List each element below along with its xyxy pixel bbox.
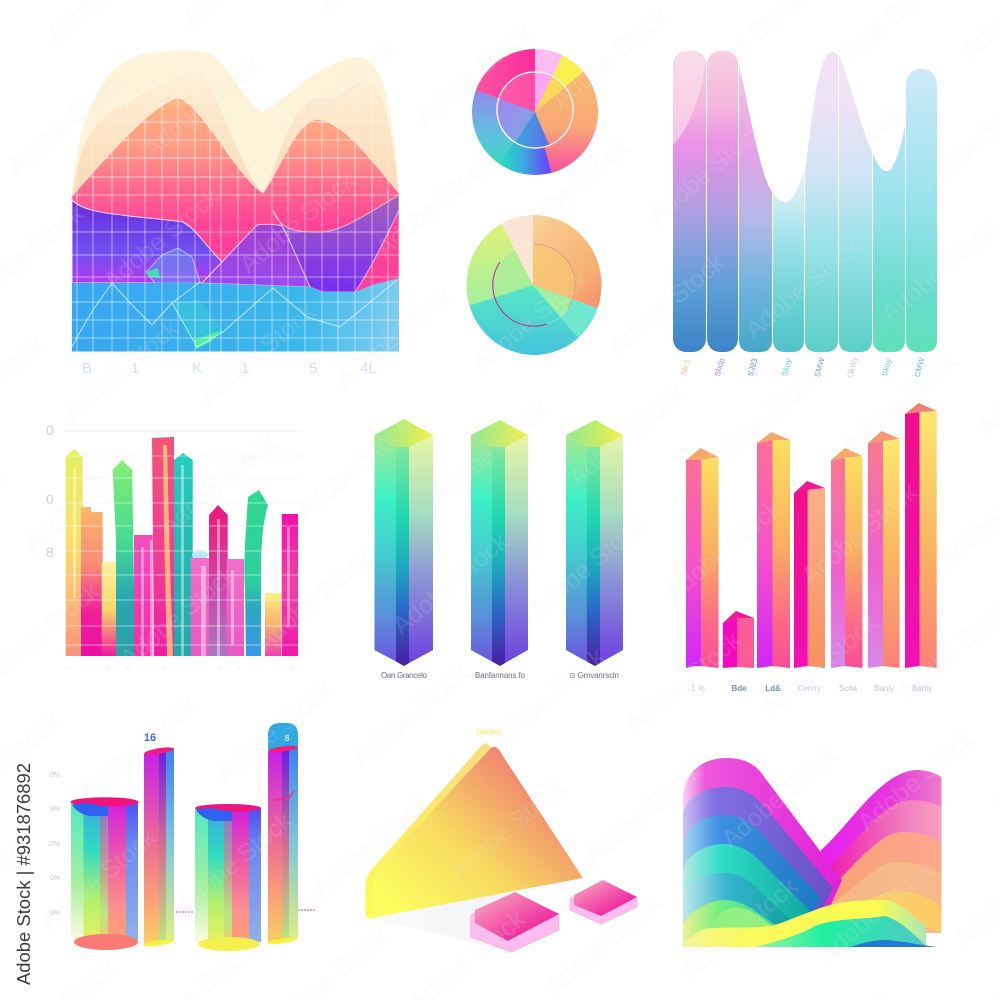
axis labels: 0% [50, 875, 60, 882]
inner purple wedge [498, 99, 535, 142]
x axis labels: 4L [360, 360, 377, 377]
pink main area [72, 98, 399, 352]
bar labels: Sc#a [839, 684, 858, 693]
bar 8 [191, 558, 209, 656]
cream back area [72, 51, 399, 352]
left face [471, 435, 492, 662]
white line series [72, 280, 397, 347]
axis labels [50, 772, 60, 917]
teal sector [472, 90, 535, 163]
ring accent [493, 262, 547, 326]
large tile [471, 892, 559, 952]
axis labels: 0% [50, 841, 60, 848]
bar labels: Shdp [713, 357, 726, 378]
bar 4 [113, 460, 135, 656]
caption: ⊙ Gmvanrscln [569, 671, 619, 680]
peach sector [502, 215, 533, 284]
ring [493, 244, 575, 326]
right face [505, 435, 528, 663]
bar 7 [174, 453, 193, 656]
bar 6 [868, 431, 900, 668]
x ticks: ~ . [237, 666, 244, 672]
inner blue wedge [516, 112, 549, 147]
x axis labels: 1 [131, 360, 139, 377]
bar labels: SJ93 [746, 357, 759, 377]
x axis labels: K [192, 360, 202, 377]
bar 6 [839, 56, 872, 352]
bar 2 [723, 611, 754, 668]
bar 5 [831, 448, 862, 668]
x ticks: ~ . [68, 666, 75, 672]
bar 10 [227, 559, 244, 656]
pale blue bump [192, 550, 208, 560]
bar labels [679, 356, 927, 379]
watermark id: Adobe Stock | #931876892 [13, 763, 34, 985]
panel: multi-colour bar chart [46, 422, 303, 672]
left face [374, 435, 396, 662]
triangle back edge [365, 743, 494, 918]
left magenta layer [683, 758, 842, 947]
small tile [570, 880, 637, 924]
bar labels: OkWy [845, 356, 860, 379]
x ticks: ~ . [290, 666, 297, 672]
green wave [755, 916, 926, 947]
x axis labels [82, 360, 377, 377]
bar labels: CMW [913, 356, 927, 378]
right salmon hump [809, 832, 942, 933]
x ticks: ~ . [143, 666, 150, 672]
x axis labels: B [82, 360, 92, 377]
x ticks: ~ . [255, 666, 262, 672]
x ticks: ~ . [125, 666, 132, 672]
bar labels: SMW [813, 356, 827, 378]
x ticks: ~ . [218, 666, 225, 672]
bar 6 [152, 437, 174, 656]
bar 11 [244, 490, 268, 656]
panel: 3D ascending bars [686, 403, 937, 693]
bar labels: Banly [874, 684, 894, 693]
peach mid area [72, 69, 399, 352]
left blue layer [683, 815, 821, 947]
top face [471, 420, 528, 447]
inner green wedge [533, 285, 572, 316]
bar labels: 1 % [691, 684, 705, 693]
bar 3 [102, 562, 117, 656]
bar 4: 8 [284, 733, 290, 743]
bar labels: Ld& [765, 684, 781, 693]
left face [566, 435, 587, 662]
left blue-teal layer [683, 873, 792, 947]
bar 6 stripe [163, 445, 173, 656]
panel: layered area chart [72, 50, 399, 377]
bar 9 [209, 505, 228, 656]
y axis labels: 8 [46, 544, 54, 560]
panel: isometric prism A [374, 419, 433, 680]
bar 13 [282, 514, 298, 656]
right yellow-orange hump [830, 891, 942, 933]
panel: pie chart top [472, 49, 598, 175]
inner lime hump [712, 907, 772, 928]
ring [497, 72, 573, 148]
bar 8 [906, 69, 937, 352]
pink sector [476, 49, 535, 112]
y axis labels [46, 422, 54, 560]
value label 16: 16 [144, 732, 156, 744]
panel: tall rounded bars with wave [673, 51, 937, 379]
x axis labels: 1 [241, 360, 249, 377]
axis labels: 0% [50, 772, 60, 779]
purple middle area [200, 224, 310, 287]
triangle label: [xxxxxx] [477, 730, 501, 736]
left green layer [683, 900, 776, 947]
light purple facet [146, 248, 200, 303]
bar labels [691, 684, 932, 693]
x ticks: ~ . [183, 666, 190, 672]
centre face [587, 447, 600, 666]
bar labels: Skoy [780, 358, 793, 377]
axis ticks [176, 910, 315, 912]
bar 3 [757, 432, 790, 668]
bar labels: Skoy [880, 358, 893, 377]
bar 4 [773, 170, 804, 352]
panel: 3D cylinder chart [50, 723, 315, 951]
aqua sector [533, 285, 598, 338]
x ticks: ~ . [106, 666, 113, 672]
yellow sector [535, 55, 584, 112]
x ticks: ~ . [88, 666, 95, 672]
light pink sector [535, 49, 562, 76]
bar 2 [143, 746, 174, 948]
right light orange hump [815, 862, 942, 933]
right pink hump [825, 800, 942, 933]
bar labels: SK'1 [679, 358, 692, 377]
inner pink wedge [500, 72, 535, 112]
top face [374, 419, 433, 447]
orange sector [533, 215, 602, 308]
bottom sector [498, 112, 552, 175]
inner light pink wedge [535, 72, 552, 112]
left purple layer [683, 787, 833, 947]
x ticks: ~ . [272, 666, 279, 672]
y axis labels: 0 [46, 422, 54, 438]
bar 2 [81, 507, 103, 656]
right face [600, 435, 623, 663]
panel: isometric prism C [566, 420, 623, 680]
yellow sector [466, 224, 533, 306]
bar 4 [794, 481, 825, 668]
bar 5 [134, 535, 153, 656]
centre face [492, 447, 505, 666]
top face [566, 420, 623, 447]
green highlight [194, 326, 226, 349]
bar labels: Banly [912, 684, 932, 693]
x ticks: ~ . [162, 666, 169, 672]
bar 1 [66, 449, 83, 656]
bar labels: Bde [731, 684, 747, 693]
bar 5 [805, 52, 838, 352]
caption: Banfannans fo [475, 671, 526, 680]
front yellow wave [683, 900, 926, 947]
inner orange wedge [533, 244, 574, 298]
bar 1 [673, 51, 706, 352]
purple right area [273, 195, 399, 292]
bar 3 [739, 66, 772, 352]
y axis labels: 0 [46, 491, 54, 507]
bar 1 [686, 448, 719, 668]
caption: Oan Grancelo [381, 671, 428, 680]
bar 12 [265, 593, 281, 656]
triangle face [372, 747, 583, 918]
teal facet [172, 300, 223, 347]
inner yellow wedge [535, 76, 564, 112]
ring orange accent [534, 244, 575, 308]
panel: isometric prism B [471, 420, 528, 680]
x ticks: ~ . [199, 666, 206, 672]
panel: 3D triangle with tiles [365, 730, 637, 952]
teal spark [146, 268, 160, 278]
axis labels: 0% [50, 806, 60, 813]
right face [409, 435, 433, 663]
orange sector [535, 72, 598, 173]
left teal layer [683, 844, 809, 947]
teal sector [470, 285, 578, 355]
cylinder 1 [70, 797, 138, 950]
purple left area [72, 200, 222, 283]
x ticks [68, 666, 297, 672]
bar 7 [905, 403, 937, 668]
shadow [373, 892, 560, 952]
axis labels: 0% [50, 910, 60, 917]
cylinder 3 [195, 804, 261, 951]
pale bar stripes [73, 465, 290, 656]
blue base area [72, 278, 399, 352]
inner yellow-green wedge [494, 250, 533, 286]
centre face [396, 447, 409, 666]
bar labels: Cenny [797, 684, 821, 693]
pale leaf [673, 51, 705, 145]
panel: pie chart bottom [466, 215, 602, 355]
bar 7 [873, 125, 905, 352]
bar 4 [267, 723, 298, 945]
blue wave [850, 940, 938, 947]
right magenta hump [821, 770, 942, 933]
x axis labels: 5 [309, 360, 317, 377]
panel: stacked wave chart [683, 758, 942, 947]
bar 2 [707, 51, 738, 352]
